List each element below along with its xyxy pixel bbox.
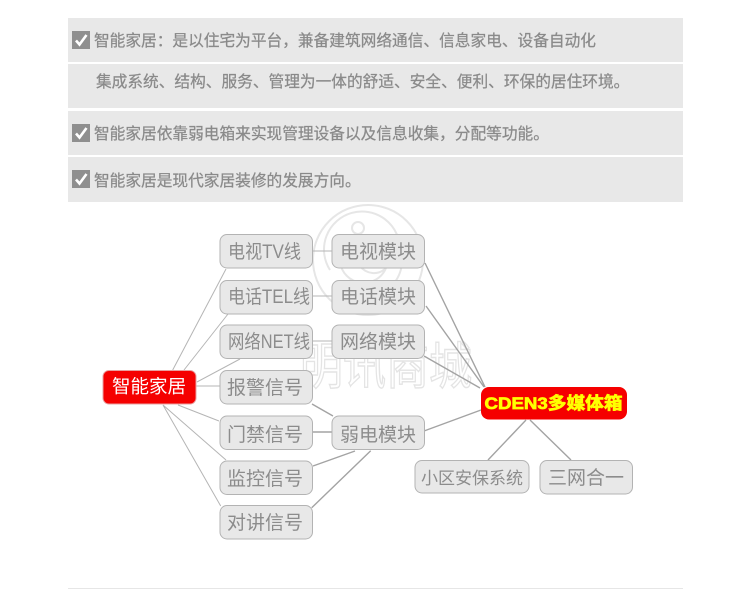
connector lines (163, 251, 571, 508)
node: 小区安保系统 (415, 460, 529, 493)
node: 电视TV线: 电视TV线 (228, 241, 301, 263)
node: 电视模块 (332, 234, 424, 268)
icon: check mark (72, 170, 90, 188)
node: CDEN3多媒体箱: CDEN3多媒体箱 (484, 393, 622, 413)
node: 网络NET线: 网络NET线 (228, 331, 310, 353)
node: 弱电模块: 弱电模块 (340, 424, 416, 446)
node: 电视模块: 电视模块 (340, 241, 416, 263)
node: 弱电模块 (332, 416, 424, 450)
node: 门禁信号: 门禁信号 (227, 424, 303, 446)
node: 电话TEL线: 电话TEL线 (228, 286, 310, 308)
node: 网络模块: 网络模块 (340, 331, 416, 353)
text: weak-current box statement: 智能家居依靠弱电箱来实现管理设备以及信息收集，分配等功能。 (94, 126, 549, 143)
node: 小区安保系统: 小区安保系统 (421, 469, 523, 488)
node: 智能家居 (103, 370, 196, 404)
node: 电话模块: 电话模块 (340, 286, 416, 308)
node: 监控信号: 监控信号 (227, 468, 303, 490)
node: 门禁信号 (220, 416, 312, 450)
icon: check mark (72, 124, 90, 142)
node: 电话TEL线 (220, 280, 312, 314)
node: 电话模块 (332, 280, 424, 314)
node: 对讲信号: 对讲信号 (227, 512, 303, 534)
watermark: 明讯商城 (300, 339, 472, 395)
node: 三网合一 (540, 460, 632, 494)
node: 网络模块 (332, 325, 424, 358)
footer divider (68, 588, 683, 589)
node: 三网合一: 三网合一 (548, 467, 624, 489)
node: 电视TV线 (220, 234, 312, 268)
text panel: development direction (68, 157, 683, 202)
text: definition continuation: 集成系统、结构、服务、管理为一体的舒适、安全、便利、环保的居住环境。 (96, 74, 629, 91)
text panel: definition line 1 (68, 18, 683, 62)
text panel: weak-current box (68, 111, 683, 155)
watermark (300, 205, 472, 395)
icon: check mark (72, 31, 90, 49)
text: definition start: 智能家居：是以住宅为平台，兼备建筑网络通信、信息家电、设备自动化 (94, 33, 596, 50)
node: 监控信号 (220, 461, 312, 494)
node: 对讲信号 (220, 506, 312, 539)
text panel: definition line 2 (68, 64, 683, 108)
text: development direction statement: 智能家居是现代家居装修的发展方向。 (94, 173, 361, 190)
node: CDEN3多媒体箱 (481, 387, 627, 420)
node: 报警信号 (220, 370, 312, 404)
node: 报警信号: 报警信号 (227, 377, 303, 399)
node: 网络NET线 (220, 325, 312, 358)
node: 智能家居: 智能家居 (112, 376, 186, 397)
